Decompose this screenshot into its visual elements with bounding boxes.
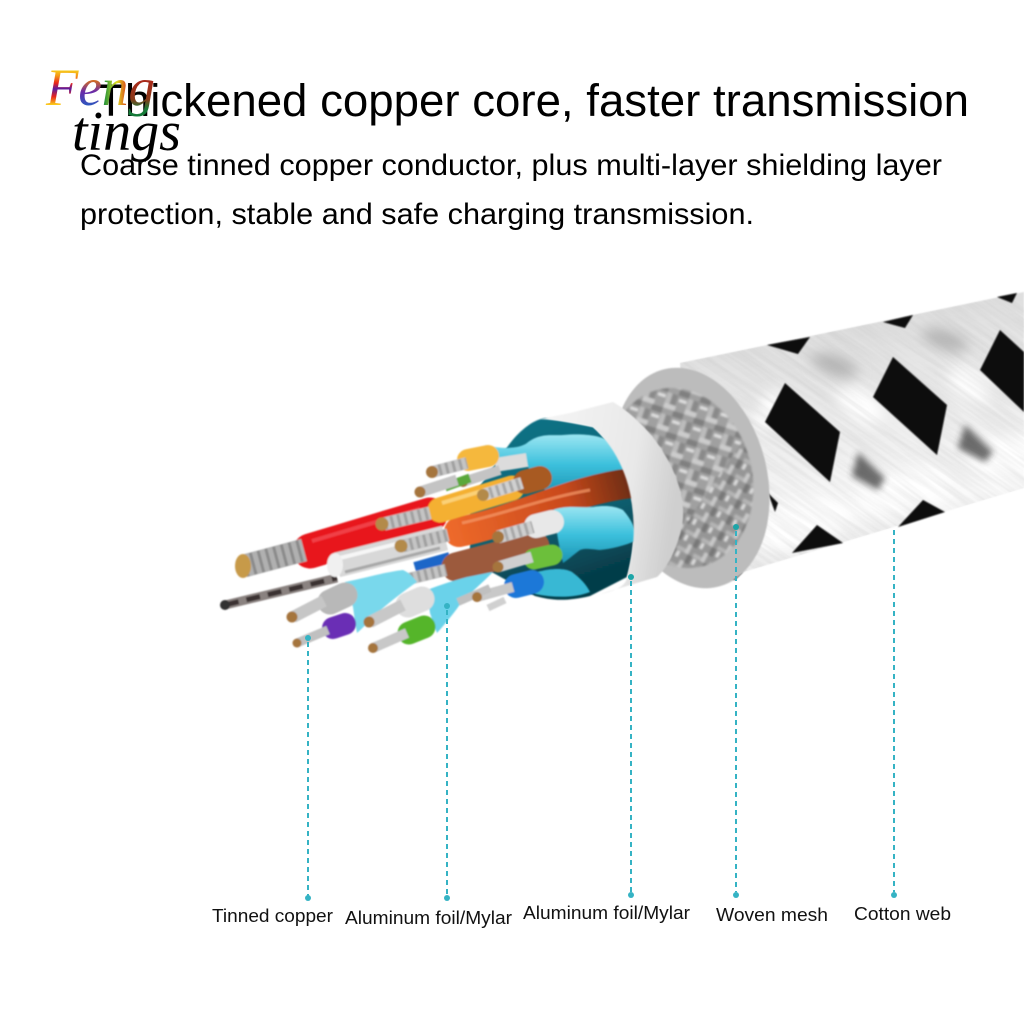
left cyan foil pair with purple wire xyxy=(286,570,417,648)
black weave patches xyxy=(727,293,1024,580)
brown foil pair xyxy=(477,478,540,501)
blue wire behind xyxy=(415,558,450,568)
leader line: cotton web xyxy=(891,530,897,898)
red wire xyxy=(235,509,430,578)
brown wire xyxy=(376,546,535,590)
leader line: aluminum foil 1 xyxy=(444,603,450,901)
label: tinned copper: Tinned copper xyxy=(212,906,333,926)
description text: protection, stable and safe charging transmission. xyxy=(80,198,754,231)
lower cyan foil with blue wire xyxy=(472,569,590,608)
orange wire xyxy=(394,483,632,552)
yellow wire xyxy=(376,484,512,530)
label: woven mesh: Woven mesh xyxy=(716,905,828,925)
label: cotton web: Cotton web xyxy=(854,904,951,924)
top cyan foil xyxy=(485,434,626,495)
aluminum foil band xyxy=(540,402,683,594)
grey end ring xyxy=(590,351,792,605)
title: Thickened copper core, faster transmission xyxy=(97,75,969,126)
label: aluminum foil left: Aluminum foil/Mylar xyxy=(345,908,512,928)
middle cyan foil pair xyxy=(492,506,637,572)
leader line: tinned copper xyxy=(305,635,311,901)
cable interior xyxy=(470,418,634,600)
leader line: aluminum foil 2 xyxy=(628,574,634,898)
top small conductors xyxy=(414,456,527,498)
white multi-strand wire xyxy=(327,533,445,577)
center cyan foil pair with green wire xyxy=(364,572,493,653)
woven mesh shield xyxy=(626,387,754,569)
label: aluminum foil right: Aluminum foil/Mylar xyxy=(523,903,690,923)
braided cotton cable jacket xyxy=(680,292,1024,581)
watermark logo: tings xyxy=(72,101,181,163)
thin black drain wire xyxy=(220,578,337,610)
watermark logo: Feng xyxy=(45,59,155,117)
wire bundle xyxy=(220,434,637,653)
leader line: woven mesh xyxy=(733,524,739,898)
description text: Coarse tinned copper conductor, plus multi-layer shielding layer xyxy=(80,149,942,182)
watermark logo xyxy=(45,59,181,163)
